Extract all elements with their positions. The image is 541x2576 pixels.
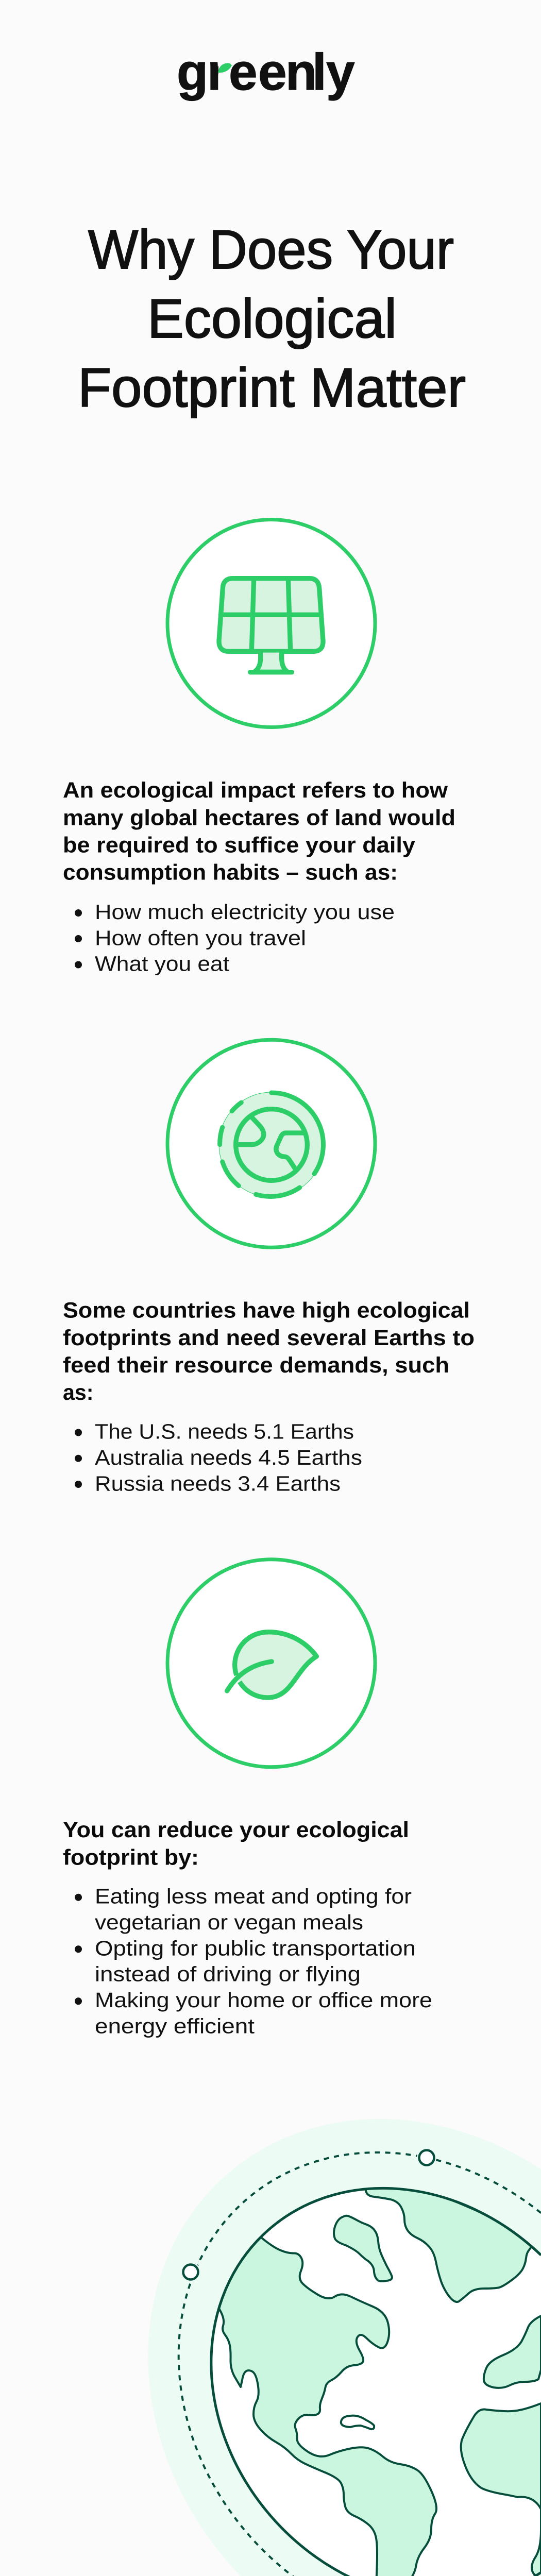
illustration: earth with orbit (148, 2119, 541, 2576)
icon: leaf in a circle (167, 1560, 375, 1767)
list: ways to reduce footprint: vegetarian or vegan meals (95, 1910, 363, 1934)
heading: what an ecological impact is: consumption habits – such as: (63, 860, 398, 885)
heading: what an ecological impact is (63, 778, 455, 885)
list: earths needed per country: Australia needs 4.5 Earths (95, 1446, 362, 1469)
icon: globe in a circle (167, 1040, 375, 1247)
heading: what an ecological impact is: be required to suffice your daily (63, 833, 415, 857)
list: ways to reduce footprint: Opting for public transportation (95, 1936, 416, 1960)
list: ways to reduce footprint: instead of driving or flying (95, 1962, 361, 1986)
title: Ecological (147, 287, 397, 349)
heading: what an ecological impact is: many global hectares of land would (63, 806, 455, 831)
list: earths needed per country: Russia needs 3.4 Earths (95, 1471, 341, 1495)
panel: reduction section (63, 1560, 432, 2038)
list: consumption habits: What you eat (95, 952, 230, 976)
list: consumption habits (75, 900, 395, 976)
list: ways to reduce footprint: Making your home or office more (95, 1988, 432, 2012)
title: Why Does Your (88, 218, 454, 280)
heading: countries with high footprints: feed their resource demands, such (63, 1353, 449, 1378)
list: consumption habits: How often you travel (95, 926, 306, 950)
icon: solar panel in a circle (167, 519, 375, 727)
earth disc (211, 2188, 541, 2576)
heading: countries with high footprints: footprints and need several Earths to (63, 1326, 475, 1350)
list: earths needed per country (75, 1420, 362, 1495)
list: ways to reduce footprint: energy efficient (95, 2014, 255, 2038)
orbit planets (181, 2148, 436, 2282)
heading: countries with high footprints: Some countries have high ecological (63, 1298, 470, 1323)
earth outline (211, 2188, 541, 2576)
heading: countries with high footprints (63, 1298, 475, 1405)
list: earths needed per country: The U.S. needs 5.1 Earths (95, 1420, 354, 1444)
list: ways to reduce footprint (75, 1885, 432, 2038)
list: ways to reduce footprint: Eating less meat and opting for (95, 1885, 412, 1908)
panel: countries section (63, 1040, 475, 1495)
continents (201, 2174, 541, 2576)
heading: how to reduce your footprint: You can reduce your ecological (63, 1818, 409, 1842)
heading: how to reduce your footprint: footprint by: (63, 1845, 199, 1870)
heading: how to reduce your footprint (63, 1818, 409, 1870)
panel: electricity section (63, 519, 455, 976)
heading: what an ecological impact is: An ecological impact refers to how (63, 778, 448, 803)
list: consumption habits: How much electricity you use (95, 900, 395, 924)
logo: greenly wordmark: greenly (177, 43, 355, 101)
heading: countries with high footprints: as: (63, 1380, 94, 1405)
title: Footprint Matter (78, 357, 466, 418)
orbit: dashed path (179, 2153, 541, 2576)
title (78, 218, 466, 418)
